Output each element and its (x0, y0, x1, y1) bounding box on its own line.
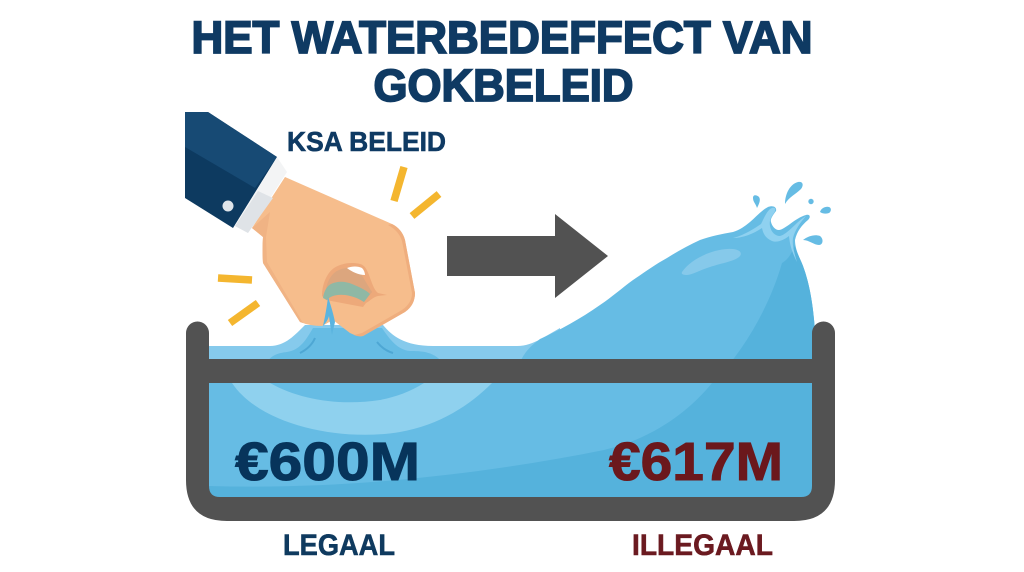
water: fist bulge (209, 325, 520, 362)
opening highlight (347, 266, 365, 275)
sleeve (185, 112, 277, 228)
icon: fist and sleeve (185, 112, 415, 336)
value: legal: €600M (235, 432, 420, 492)
hand (252, 177, 415, 336)
wave crest highlight (733, 208, 806, 262)
fist opening (322, 263, 387, 307)
wave body (520, 206, 815, 384)
value: illegal: €617M (609, 432, 783, 492)
hand shading (252, 212, 303, 323)
tank (186, 322, 835, 521)
trapped water (323, 282, 370, 302)
icon: impact rays (218, 167, 439, 323)
splash droplets (753, 182, 831, 245)
arrow (447, 214, 608, 298)
tank water (209, 375, 812, 497)
wave highlight (682, 249, 741, 275)
label: illegaal: ILLEGAAL (632, 529, 773, 562)
leak stream (323, 297, 335, 335)
cuff (235, 157, 287, 233)
light crescent (232, 383, 492, 435)
label: KSA beleid: KSA BELEID (287, 126, 446, 157)
wave shaded side (712, 245, 815, 384)
label: legaal: LEGAAL (283, 529, 395, 562)
title: GOKBELEID (374, 60, 634, 111)
water: large wave (500, 182, 831, 384)
ripple marks (300, 338, 315, 353)
title: HET WATERBEDEFFECT VAN (192, 12, 812, 63)
cuff button (222, 200, 234, 212)
wave fringe (500, 328, 560, 362)
title (192, 12, 812, 111)
